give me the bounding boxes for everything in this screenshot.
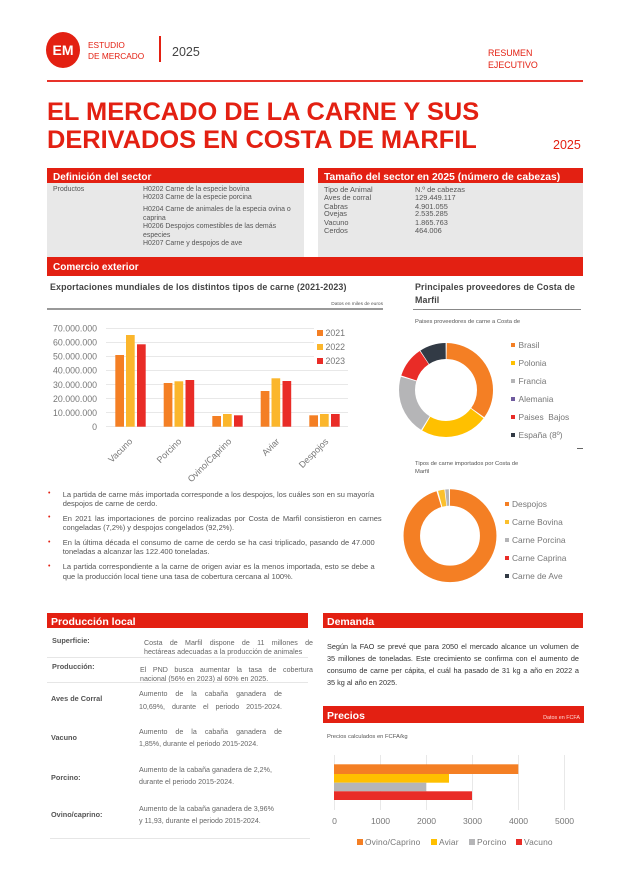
panel: producción local: 1,85%, durante el periodo 2015-2024. <box>139 740 258 748</box>
subtitle: tipos de carne: Marfil <box>415 469 429 475</box>
bar chart: exportaciones: 40.000.000 <box>53 366 97 376</box>
row: producción: Producción: <box>52 662 95 671</box>
panel: producción local: Aumento de la cabaña ganadera de <box>139 728 282 736</box>
donut chart: proveedores <box>399 340 569 440</box>
product codes: especies <box>143 232 170 239</box>
table: cabezas: 129.449.117 <box>415 192 456 202</box>
text block: bullets: • <box>48 490 50 497</box>
bar chart: precios: 2000 <box>417 816 436 826</box>
row: superficie: Superficie: <box>52 636 90 645</box>
bar chart: exportaciones: 50.000.000 <box>53 352 97 362</box>
table: cabezas: Tipo de Animal <box>324 185 373 194</box>
bar chart: exportaciones: 2021 <box>326 328 345 338</box>
heading: comercio exterior <box>47 257 583 276</box>
title <box>47 98 479 154</box>
heading: comercio exterior: Comercio exterior <box>53 262 139 273</box>
heading: definición <box>47 168 304 183</box>
bar chart: exportaciones: 10.000.000 <box>53 408 97 418</box>
bar chart: exportaciones: 20.000.000 <box>53 394 97 404</box>
donut chart: proveedores: Paises Bajos <box>518 412 569 422</box>
panel: producción local: Aumento de la cabaña ganadera de 2,2%, <box>139 766 272 774</box>
subtitle: tipos de carne <box>415 461 518 475</box>
row: aves de corral: Aves de Corral <box>51 694 102 703</box>
panel: producción local: y 11,93, durante el periodo 2015-2024. <box>139 817 261 825</box>
bar chart: precios: 5000 <box>555 816 574 826</box>
panel: producción local: Aumento de la cabaña ganadera de <box>139 690 282 698</box>
panel: producción local: 10,69%, durante el periodo 2015-2024. <box>139 703 282 711</box>
resumen ejecutivo label <box>488 48 538 70</box>
brand text <box>88 40 144 60</box>
heading: definición: Definición del sector <box>53 172 151 183</box>
heading: producción: Producción local <box>51 616 136 628</box>
heading: precios <box>323 706 584 723</box>
bar chart: exportaciones: Aviar <box>260 436 281 458</box>
donut chart: proveedores: Francia <box>518 376 547 386</box>
subtitle: países: Paises proveedores de carne a Costa de <box>415 319 520 325</box>
row: ovino/caprino: Ovino/caprino: <box>51 810 102 819</box>
panel: demanda <box>323 613 583 687</box>
text block: bullets: despojos de carne de cerdo. <box>63 499 157 508</box>
product codes: caprina <box>143 215 166 222</box>
donut chart: proveedores: Brasil <box>518 340 540 350</box>
bar chart: exportaciones: 0 <box>92 422 97 432</box>
text block: bullets <box>48 490 382 580</box>
panel: producción local <box>47 613 313 839</box>
panel: producción local: El PND busca aumentar la tasa de cobertura <box>140 666 313 674</box>
heading: producción <box>47 613 308 628</box>
note: miles de euros: Datos en miles de euros <box>331 302 383 307</box>
heading: demanda <box>323 613 583 628</box>
text block: bullets: La partida de carne más importada corresponde a los despojos, los cuáles son en su mayoría <box>63 490 374 499</box>
note: datos en FCFA: Datos en FCFA <box>543 715 580 721</box>
product codes: H0202 Carne de la especie bovina <box>143 186 249 193</box>
panel: producción local: Aumento de la cabaña ganadera de 3,96% <box>139 805 274 813</box>
bar chart: precios: 3000 <box>463 816 482 826</box>
text: demanda: 35 millones de toneladas. Este crecimiento se confirma con el aumento de <box>327 654 579 663</box>
bar chart: exportaciones: 70.000.000 <box>53 324 97 334</box>
row: porcino: Porcino: <box>51 773 81 782</box>
bar chart: exportaciones: Vacuno <box>106 436 134 465</box>
resumen ejecutivo label: RESUMEN <box>488 48 532 58</box>
text block: bullets: que la producción local tiene una tasa de cobertura cercana al 100%. <box>63 572 293 580</box>
text: demanda: 35 kg al año en 2025. <box>327 678 397 687</box>
heading: principales proveedores: Principales proveedores de Costa de <box>415 282 575 292</box>
product codes: H0203 Carne de la especie porcina <box>143 194 252 201</box>
header year: 2025 <box>172 45 200 59</box>
table: cabezas: Aves de corral <box>324 192 371 202</box>
bar chart: exportaciones: 60.000.000 <box>53 338 97 348</box>
title: EL MERCADO DE LA CARNE Y SUS <box>47 98 479 126</box>
product codes: H0204 Carne de animales de la especia ovina o <box>143 206 291 213</box>
heading: tamaño: Tamaño del sector en 2025 (número de cabezas) <box>324 172 560 183</box>
heading: tamaño <box>318 168 583 183</box>
table: cabezas <box>324 185 465 235</box>
text block: bullets: En la última década el consumo de carne de cerdo se ha casi triplicado, pasando de 47.000 <box>63 538 375 547</box>
table: cabezas: Cerdos <box>324 226 348 235</box>
text block: bullets: toneladas a alcanzar las 122.400 toneladas. <box>63 547 209 556</box>
table: cabezas: 1.865.763 <box>415 218 448 227</box>
table: cabezas: 464.006 <box>415 226 442 235</box>
bar chart: precios: 4000 <box>509 816 528 826</box>
bar chart: precios: Porcino <box>477 837 507 847</box>
product codes: H0207 Carne y despojos de ave <box>143 240 242 247</box>
bar chart: precios: 0 <box>332 816 337 826</box>
text block: bullets: congeladas (7,2%) y despojos congelados (92,2%). <box>63 522 234 532</box>
donut chart: proveedores: España (8º) <box>518 430 563 440</box>
text: demanda: Según la FAO se prevé que para 2050 el mercado alcance un volumen de <box>327 642 579 651</box>
heading: principales proveedores: Marfil <box>415 295 439 305</box>
brand text: DE MERCADO <box>88 50 144 60</box>
subtitle: tipos de carne: Tipos de carne importados por Costa de <box>415 461 518 467</box>
text block: bullets: • <box>48 563 50 570</box>
bar chart: exportaciones: 2023 <box>326 356 345 366</box>
bar chart: precios: 1000 <box>371 816 390 826</box>
donut chart: proveedores: Polonia <box>518 358 547 368</box>
bar chart: precios: Vacuno <box>524 837 553 847</box>
subtitle: precios: Precios calculados en FCFA/kg <box>327 734 408 740</box>
bar chart: precios <box>332 755 574 847</box>
logo: EM <box>52 42 74 58</box>
panel: producción local: nacional (56% en 2023) al 60% en 2025. <box>140 675 268 683</box>
donut chart: tipos de carne: Despojos <box>512 499 547 509</box>
heading: principales proveedores <box>415 282 575 305</box>
text block: bullets: La partida correspondiente a la carne de origen aviar es la menos importada, esto se debe a <box>63 562 375 571</box>
heading: exportaciones: Exportaciones mundiales de los distintos tipos de carne (2021-2023) <box>50 282 347 292</box>
donut chart: tipos de carne: Carne Caprina <box>512 553 567 563</box>
donut chart: tipos de carne: Carne Porcina <box>512 535 566 545</box>
bar chart: exportaciones <box>53 324 348 483</box>
donut chart: tipos de carne: Carne de Ave <box>512 571 563 581</box>
panel: definición del sector <box>47 168 304 257</box>
product codes <box>143 186 291 247</box>
text block: bullets: En 2021 las importaciones de porcino realizadas por Costa de Marfil consistieron en carnes <box>63 514 382 522</box>
heading: precios: Precios <box>327 710 365 722</box>
panel: producción local: durante el periodo 2015-2024. <box>139 778 234 786</box>
table: cabezas: 4.901.055 <box>415 202 448 210</box>
text: demanda <box>327 642 579 687</box>
table: cabezas: Ovejas <box>324 209 347 218</box>
text block: bullets: • <box>48 514 50 521</box>
bar chart: exportaciones: Ovino/Caprino <box>186 436 233 483</box>
bar chart: exportaciones: Porcino <box>155 436 183 465</box>
donut chart: tipos de carne: Carne Bovina <box>512 517 563 527</box>
bar chart: exportaciones: 2022 <box>326 342 345 352</box>
panel: producción local: Costa de Marfil dispone de 11 millones de <box>144 639 313 647</box>
panel: tamaño del sector <box>318 168 583 257</box>
heading: demanda: Demanda <box>327 616 374 628</box>
bar chart: exportaciones: 30.000.000 <box>53 380 97 390</box>
text: demanda: consumo de carne per cápita, el cuál ha pasado de 31 kg a año en 2022 a <box>327 666 579 675</box>
table: cabezas: Vacuno <box>324 218 349 227</box>
donut chart: tipos de carne <box>404 489 567 582</box>
resumen ejecutivo label: EJECUTIVO <box>488 60 538 70</box>
donut chart: proveedores: Alemania <box>518 394 554 404</box>
table: cabezas: 2.535.285 <box>415 209 448 218</box>
bar chart: exportaciones: Despojos <box>297 436 331 470</box>
panel: producción local: hectáreas adecuadas a la producción de animales <box>144 648 302 656</box>
brand text: ESTUDIO <box>88 40 125 50</box>
bar chart: precios: Aviar <box>439 837 459 847</box>
title year: 2025 <box>553 138 581 152</box>
text block: bullets: • <box>48 539 50 546</box>
table: cabezas: N.º de cabezas <box>415 185 465 194</box>
row: vacuno: Vacuno <box>51 733 77 742</box>
product codes: H0206 Despojos comestibles de las demás <box>143 223 276 230</box>
table: cabezas: Cabras <box>324 202 348 210</box>
productos label: Productos <box>53 186 84 193</box>
logo <box>46 32 80 68</box>
bar chart: precios: Ovino/Caprino <box>365 837 421 847</box>
title: DERIVADOS EN COSTA DE MARFIL <box>47 126 477 154</box>
